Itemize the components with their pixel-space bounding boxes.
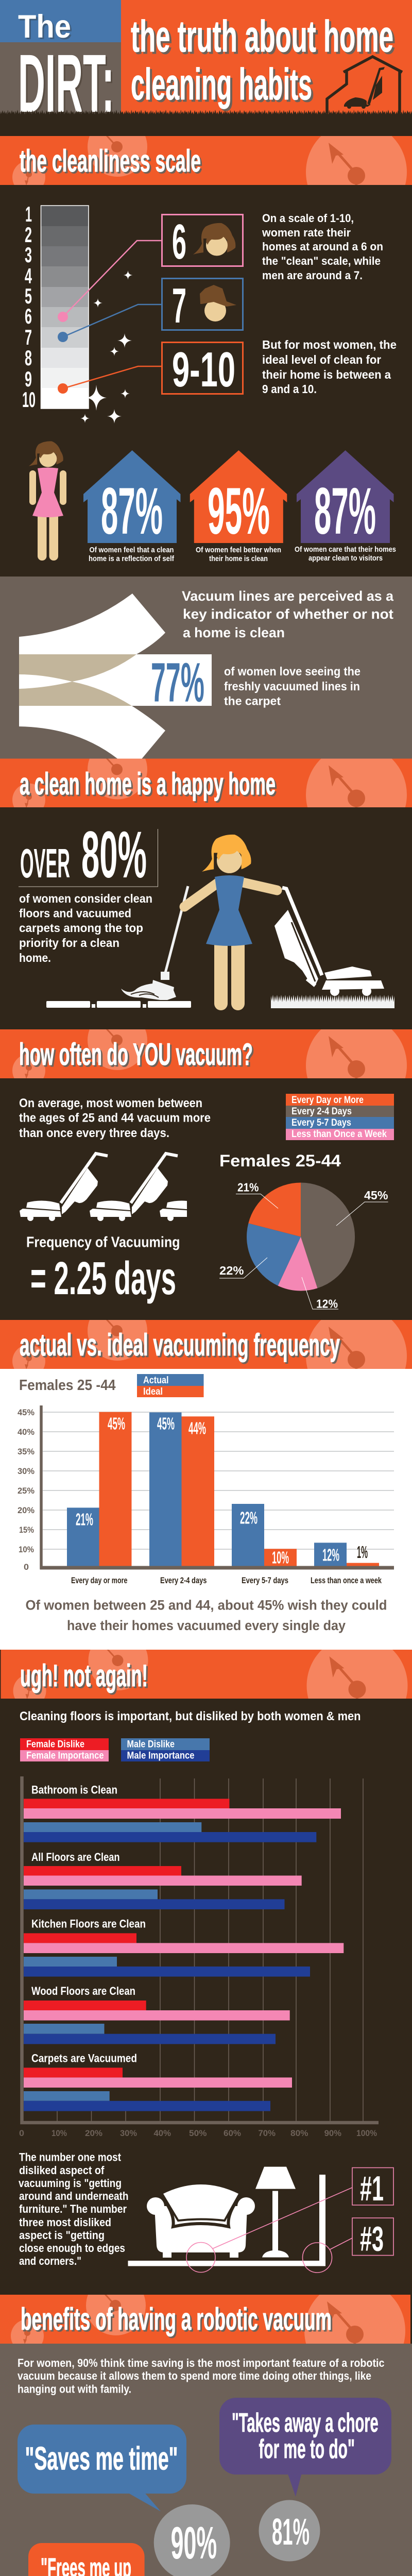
- connector: orange 9-10: [58, 366, 162, 394]
- section bar: how often do you vacuum: [0, 1029, 412, 1078]
- heading: the cleanliness scale: the cleanliness scale: [20, 144, 201, 178]
- text: of women love: freshly vacuumed lines in: [224, 680, 360, 693]
- bar chart: 21%: [76, 1510, 93, 1529]
- conclusion text: [26, 1597, 387, 1633]
- text: women consider clean floors: floors and vacuumed: [19, 907, 131, 920]
- scale bar 1 to 10: [22, 202, 89, 412]
- text: most disliked aspect: aspect is "getting: [19, 2229, 105, 2242]
- horizontal bar chart: 40%: [153, 2128, 171, 2138]
- pie chart: females 25-44: 22%: [219, 1264, 244, 1277]
- box: 7 man: 7: [172, 278, 186, 333]
- conclusion text: have their homes vacuumed every single day: [67, 1618, 346, 1633]
- text: ideal level: their home is between a: [262, 368, 391, 381]
- pie chart: females 25-44: 12%: [316, 1297, 338, 1311]
- legend: male: Male Dislike: [127, 1739, 175, 1750]
- subheading: cleaning floors: Cleaning floors is important, but disliked by both women & men: [20, 1709, 360, 1723]
- text: most disliked aspect: around and underneath: [19, 2190, 129, 2202]
- text: vacuum lines key indicator: a home is clean: [183, 625, 285, 640]
- legend: frequency: Less than Once a Week: [291, 1129, 387, 1140]
- panel: benefits: [0, 2344, 412, 2576]
- box: 6 woman: [162, 214, 243, 269]
- bar chart: Less than once a week: [311, 1575, 382, 1585]
- text: on average: [19, 1096, 211, 1140]
- text: ideal level: [262, 338, 397, 396]
- text: most disliked aspect: The number one most: [19, 2150, 122, 2164]
- scale bar 1 to 10: 10: [22, 387, 36, 412]
- stat house: 95% feel better: Of women feel better when: [196, 546, 281, 554]
- section bar: a clean home is a happy home: [0, 758, 412, 807]
- legend: male: Male Importance: [127, 1751, 195, 1761]
- panel: how often: [19, 1094, 394, 1310]
- legend: actual ideal: Ideal: [143, 1386, 163, 1397]
- callouts: #1 and #3: #1: [360, 2169, 384, 2208]
- horizontal bar chart: Kitchen Floors are Clean: [31, 1918, 146, 1930]
- carpet vacuum lines graphic: [19, 594, 212, 758]
- text: on average: the ages of 25 and 44 vacuum more: [19, 1111, 211, 1125]
- bar chart: 20%: [18, 1505, 35, 1515]
- stat house: 87% visitors: appear clean to visitors: [308, 554, 383, 563]
- heading: ugh not again: ugh! not again!: [20, 1658, 148, 1693]
- scale bar 1 to 10: 2: [25, 223, 32, 247]
- bar chart: 1%: [357, 1543, 368, 1562]
- box: 7 man: [162, 278, 243, 333]
- icon: armchair: [147, 2184, 255, 2258]
- text: scale of 1-10: women rate their: [262, 226, 351, 239]
- stat: frequency of vacuuming: Frequency of Vacuuming: [26, 1234, 180, 1251]
- scale bar 1 to 10: 1: [25, 202, 32, 226]
- horizontal bar chart: Carpets are Vacuumed: [31, 2052, 137, 2065]
- bar chart: 44%: [188, 1419, 206, 1438]
- box: 9-10: 9-10: [172, 342, 235, 397]
- text: scale of 1-10: men are around a 7.: [262, 269, 363, 282]
- text: most disliked aspect: and corners.": [19, 2255, 81, 2267]
- icons: two and a quarter vacuums: [20, 1152, 187, 1221]
- text: most disliked aspect: vacuuming is "getting: [19, 2177, 122, 2190]
- horizontal bar chart: 20%: [85, 2128, 102, 2138]
- stat: over 80%: 80%: [81, 818, 147, 892]
- legend: female: Female Importance: [26, 1751, 104, 1761]
- pie chart: females 25-44: Females 25-44: [219, 1151, 341, 1170]
- text: women consider clean floors: priority for a clean: [19, 936, 119, 950]
- stat house: 87% reflection of self: home is a reflection of self: [89, 554, 175, 563]
- text: scale of 1-10: [262, 212, 383, 282]
- circle: 81% chore: 81%: [272, 2512, 310, 2553]
- bar chart: 30%: [18, 1466, 35, 1476]
- stat: frequency of vacuuming: [26, 1234, 180, 1304]
- legend: female: Female Dislike: [26, 1739, 84, 1750]
- legend: frequency: [286, 1094, 394, 1140]
- subtitle: the truth about home cleaning habits: [131, 12, 393, 109]
- text: of women love: the carpet: [224, 694, 281, 708]
- icon: floor lamp: [255, 2167, 296, 2258]
- circle: 90%: [154, 2504, 230, 2576]
- text: of women love: [224, 665, 360, 708]
- text: women consider clean floors: carpets among the top: [19, 921, 143, 935]
- bar chart: 10%: [272, 1548, 289, 1567]
- text: most disliked aspect: furniture." The number: [19, 2202, 127, 2215]
- panel: vacuum lines: [0, 577, 412, 759]
- text: vacuum lines key indicator: key indicator of whether or not: [183, 606, 393, 622]
- stat house: 87% visitors: [295, 450, 396, 563]
- bar chart: Every day or more: [71, 1575, 128, 1585]
- connector: blue 7: [58, 304, 162, 342]
- stat house: 87% reflection of self: [83, 450, 180, 563]
- legend: frequency: Every 5-7 Days: [291, 1117, 351, 1128]
- legend: actual ideal: Actual: [143, 1375, 169, 1386]
- bar chart: [18, 1405, 394, 1585]
- text: women consider clean floors: home.: [19, 951, 51, 964]
- section bar: ugh not again: [1, 1650, 412, 1699]
- text: scale of 1-10: homes at around a 6 on: [262, 240, 383, 253]
- panel: cleanliness scale: [0, 185, 412, 577]
- text: women consider clean floors: [19, 892, 152, 964]
- title: The DIRT: The: [18, 9, 71, 45]
- horizontal bar chart: 90%: [324, 2128, 341, 2138]
- text: vacuum lines key indicator: [182, 588, 394, 640]
- text: ideal level: 9 and a 10.: [262, 382, 317, 396]
- figure: woman in pink dress: [29, 441, 66, 561]
- panel: happy home: [0, 807, 412, 1029]
- text: most disliked aspect: disliked aspect of: [19, 2164, 105, 2177]
- intro text: vacuum because it allows them to spend more time doing other things, like: [18, 2369, 371, 2382]
- horizontal bar chart: [19, 1776, 379, 2138]
- wall and floor: [128, 2175, 325, 2266]
- circle: 81% chore: [259, 2500, 320, 2562]
- stat house: 95% feel better: 95%: [208, 474, 270, 548]
- text: on average: than once every three days.: [19, 1126, 169, 1140]
- intro text: [18, 2357, 384, 2396]
- bar chart: 35%: [18, 1447, 35, 1456]
- text: most disliked aspect: three most disliked: [19, 2216, 111, 2229]
- scale bar 1 to 10: 8: [25, 346, 32, 370]
- connector: pink 6: [58, 241, 162, 322]
- box: 9-10: [162, 342, 243, 397]
- horizontal bar chart: 60%: [224, 2128, 241, 2138]
- title: The DIRT: [18, 9, 114, 129]
- horizontal bar chart: Wood Floors are Clean: [31, 1985, 135, 1997]
- legend: actual ideal: [137, 1374, 204, 1397]
- speech bubble: saves me time: "Saves me time": [25, 2441, 178, 2477]
- stat house: 87% visitors: Of women care that their homes: [295, 545, 396, 554]
- pie chart: females 25-44: [219, 1151, 388, 1311]
- text: ideal level: But for most women, the: [262, 338, 397, 351]
- figure: woman with mop and vacuum: [46, 835, 394, 1010]
- stat house: 95% feel better: [190, 450, 287, 563]
- sparkles: [80, 270, 133, 423]
- horizontal bar chart: 80%: [290, 2128, 308, 2138]
- horizontal bar chart: Bathroom is Clean: [31, 1784, 117, 1797]
- panel: ugh not again: [0, 1699, 412, 2295]
- bar chart: 22%: [240, 1509, 258, 1528]
- section bar: benefits: [0, 2295, 410, 2344]
- bar chart: 45%: [18, 1408, 35, 1417]
- text: scale of 1-10: On a scale of 1-10,: [262, 212, 354, 225]
- horizontal bar chart: 0: [19, 2128, 24, 2138]
- pie chart: females 25-44: 45%: [364, 1189, 388, 1202]
- panel: header: DIRT:: [18, 37, 114, 129]
- stat house: 87% reflection of self: 87%: [101, 474, 163, 548]
- legend: frequency: Every Day or More: [291, 1095, 364, 1106]
- scale bar 1 to 10: 7: [25, 325, 32, 349]
- speech bubble: saves me time: [18, 2425, 186, 2512]
- bar chart: 12%: [322, 1546, 339, 1565]
- callouts: #1 and #3: [186, 2168, 393, 2273]
- text: of women love: of women love seeing the: [224, 665, 360, 678]
- horizontal bar chart: 10%: [52, 2128, 67, 2138]
- text: vacuum lines key indicator: Vacuum lines are perceived as a: [182, 588, 394, 604]
- box: 6 woman: 6: [172, 214, 186, 269]
- carpet vacuum lines graphic: 77%: [151, 651, 204, 713]
- legend: female: [20, 1738, 109, 1761]
- chart title: females 25-44: Females 25 -44: [19, 1377, 115, 1394]
- panel: actual vs ideal chart: [0, 1369, 412, 1650]
- horizontal bar chart: All Floors are Clean: [31, 1851, 120, 1863]
- speech bubble: frees me up: [28, 2543, 145, 2576]
- scale bar 1 to 10: 6: [25, 304, 32, 328]
- text: most disliked aspect: close enough to edges: [19, 2242, 125, 2255]
- text: ideal level: ideal level of clean for: [262, 353, 381, 366]
- bar chart: 45%: [108, 1414, 125, 1433]
- bar chart: 10%: [19, 1545, 34, 1554]
- horizontal bar chart: 50%: [189, 2128, 207, 2138]
- grass silhouette: [0, 110, 412, 120]
- horizontal bar chart: 100%: [356, 2128, 377, 2138]
- text: on average: On average, most women between: [19, 1096, 202, 1110]
- speech bubble: takes away a chore: [219, 2398, 391, 2497]
- text: scale of 1-10: the "clean" scale, while: [262, 255, 381, 267]
- bar chart: 15%: [19, 1525, 34, 1535]
- bar chart: 45%: [157, 1414, 175, 1433]
- stat: frequency of vacuuming: = 2.25 days: [30, 1253, 176, 1304]
- callouts: #1 and #3: #3: [360, 2219, 384, 2259]
- scale bar 1 to 10: 5: [25, 284, 32, 308]
- conclusion text: Of women between 25 and 44, about 45% wish they could: [26, 1597, 387, 1613]
- horizontal bar chart: 70%: [259, 2128, 276, 2138]
- horizontal bar chart: 30%: [120, 2128, 137, 2138]
- section bar: actual vs ideal: [0, 1320, 412, 1369]
- text: most disliked aspect: [19, 2150, 129, 2267]
- scale bar 1 to 10: 4: [25, 264, 32, 288]
- icon: house with vacuum: [327, 57, 402, 113]
- bar chart: Every 5-7 days: [242, 1575, 288, 1585]
- circle: 90%: 90%: [171, 2517, 217, 2568]
- bar chart: 0: [24, 1562, 29, 1572]
- scale bar 1 to 10: 9: [25, 367, 32, 391]
- stat: over 80%: [19, 818, 158, 892]
- scale bar 1 to 10: 3: [25, 243, 32, 267]
- stat house: 87% reflection of self: Of women feel that a clean: [90, 546, 174, 554]
- stat: over 80%: OVER: [20, 840, 70, 886]
- bar chart: 40%: [18, 1427, 35, 1437]
- legend: male: [121, 1738, 210, 1761]
- bar chart: 25%: [18, 1486, 35, 1496]
- intro text: hanging out with family.: [18, 2382, 131, 2396]
- section bar: the cleanliness scale: [0, 136, 412, 185]
- panel: header: [0, 0, 412, 136]
- stat house: 95% feel better: their home is clean: [209, 554, 268, 563]
- bar chart: Every 2-4 days: [160, 1575, 207, 1585]
- text: women consider clean floors: of women consider clean: [19, 892, 152, 905]
- legend: frequency: Every 2-4 Days: [291, 1106, 352, 1117]
- pie chart: females 25-44: 21%: [237, 1181, 259, 1194]
